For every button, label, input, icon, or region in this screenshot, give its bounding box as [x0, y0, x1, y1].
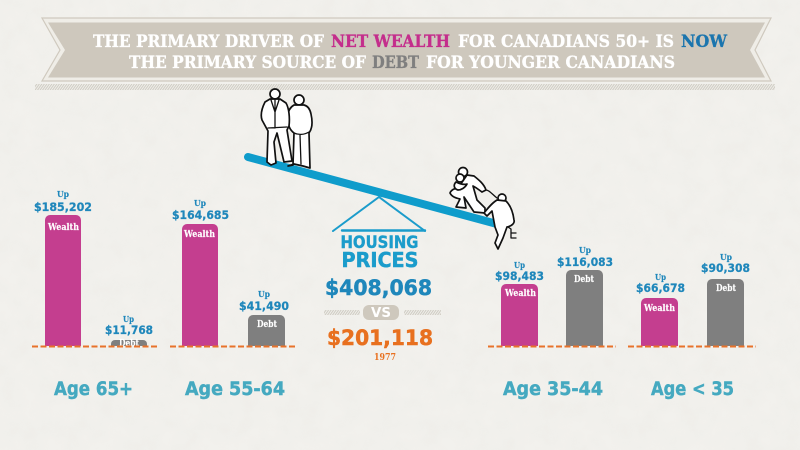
icon: house roof fulcrum: [333, 197, 425, 231]
debt bar 55-64: [248, 315, 285, 346]
seesaw beam: [248, 157, 497, 224]
panel: age 65+: [32, 190, 159, 400]
panel: age 55-64: [170, 199, 297, 400]
debt value 35-44: $116,083: [557, 255, 613, 269]
title text: DEBT: [372, 53, 420, 72]
debt value 65+: [105, 315, 153, 337]
title text: THE PRIMARY DRIVER OF: [93, 32, 324, 51]
title text: NOW: [681, 32, 727, 51]
wealth bar under 35: Wealth: [643, 304, 675, 314]
wealth value under 35: Up: [655, 273, 666, 283]
debt value under 35: [701, 253, 750, 275]
wealth value 35-44: [495, 261, 544, 283]
title text: NET WEALTH: [331, 32, 450, 51]
age label 65+: Age 65+: [54, 379, 133, 400]
debt bar under 35: [707, 279, 744, 346]
title text: THE PRIMARY SOURCE OF: [129, 53, 366, 72]
debt value 55-64: Up: [258, 290, 270, 300]
wealth value 35-44: $98,483: [495, 269, 544, 283]
wealth value 65+: Up: [57, 190, 69, 200]
wealth bar under 35: [641, 298, 678, 346]
age label 55-64: Age 55-64: [185, 379, 285, 400]
wealth value under 35: [636, 273, 685, 295]
year label: 1977: [374, 353, 396, 363]
debt bar under 35: Debt: [716, 284, 737, 294]
heading: housing prices: [340, 233, 418, 272]
wealth value 55-64: $164,685: [172, 208, 229, 222]
age label under 35: Age < 35: [651, 379, 734, 400]
debt bar 65+: Debt: [119, 339, 140, 349]
wealth value 55-64: Up: [194, 199, 206, 209]
wealth bar 35-44: [501, 284, 538, 346]
debt value 35-44: [557, 246, 613, 269]
debt value 35-44: Up: [579, 246, 591, 256]
wealth value 65+: [34, 190, 92, 214]
panel: age under 35: [628, 253, 756, 400]
debt value 55-64: $41,490: [239, 299, 289, 313]
wealth value under 35: $66,678: [636, 281, 685, 295]
wealth bar 55-64: [182, 224, 218, 346]
age label 35-44: Age 35-44: [503, 379, 603, 400]
debt value under 35: Up: [720, 253, 732, 263]
heading: housing prices: HOUSING: [340, 233, 418, 252]
title text: FOR CANADIANS 50+ IS: [458, 32, 674, 51]
wealth value 55-64: [172, 199, 229, 222]
vs divider: [324, 305, 441, 321]
debt value 65+: Up: [123, 315, 134, 325]
debt bar 55-64: Debt: [257, 320, 278, 330]
wealth bar 65+: Wealth: [47, 223, 79, 233]
wealth bar 55-64: Wealth: [183, 230, 215, 240]
1977 price: $201,118: [327, 326, 433, 350]
wealth bar 35-44: Wealth: [504, 289, 536, 299]
current price: $408,068: [325, 276, 432, 300]
heading: housing prices: PRICES: [342, 248, 418, 272]
icon: younger pair struggling up beam: [450, 168, 516, 249]
debt value under 35: $90,308: [701, 261, 750, 275]
panel: age 35-44: [488, 246, 616, 400]
vs divider: VS: [371, 306, 391, 321]
title text: [93, 32, 727, 72]
title text: FOR YOUNGER CANADIANS: [426, 53, 675, 72]
debt value 55-64: [239, 290, 289, 313]
debt bar 35-44: Debt: [574, 275, 595, 285]
debt value 65+: $11,768: [105, 323, 153, 337]
wealth value 35-44: Up: [514, 261, 525, 271]
wealth bar 65+: [45, 215, 81, 346]
debt bar 65+: [111, 339, 147, 349]
title banner: [35, 18, 775, 90]
icon: older couple standing on beam: [261, 89, 516, 249]
debt bar 35-44: [566, 270, 603, 346]
wealth value 65+: $185,202: [34, 200, 92, 214]
